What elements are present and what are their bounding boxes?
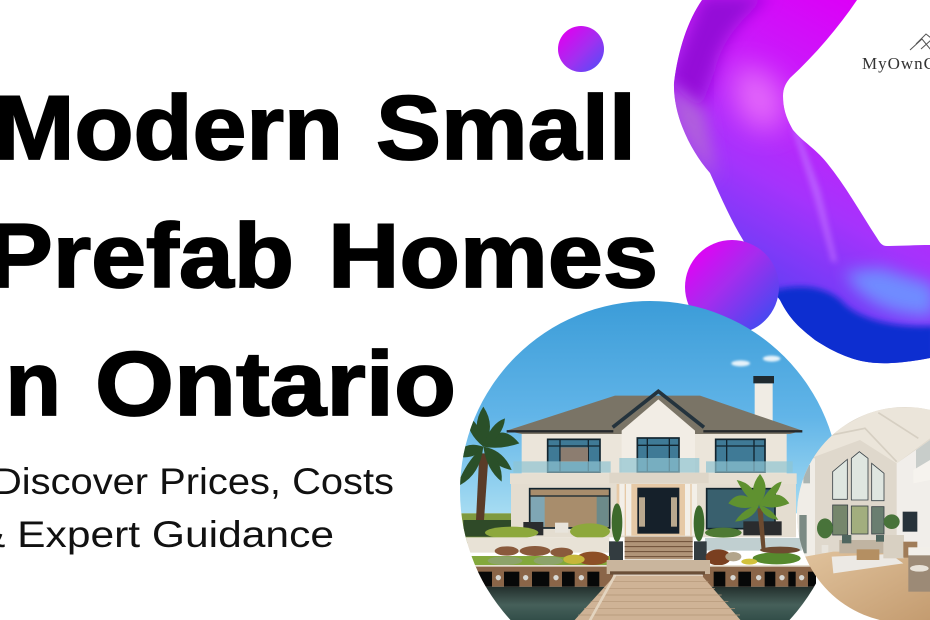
plants (817, 514, 900, 538)
clouds (731, 356, 780, 366)
left palm (457, 407, 519, 520)
subtitle: Discover Prices, Costs (0, 461, 394, 502)
terrace wall (466, 537, 609, 553)
title: Ontario (95, 334, 456, 435)
steps (625, 537, 693, 559)
upper windows (548, 438, 765, 472)
patio furniture (523, 521, 782, 535)
garden left (470, 546, 610, 565)
columns (619, 484, 697, 536)
dock (572, 560, 743, 620)
chimney (753, 376, 774, 421)
water (486, 586, 814, 620)
photo: lakeside house (457, 300, 840, 620)
sky (460, 300, 840, 513)
title: Modern (0, 78, 343, 179)
front door (637, 488, 679, 534)
planters (609, 503, 707, 560)
decorative purple sphere (685, 240, 779, 334)
logo mark (910, 34, 930, 50)
title: Small (376, 78, 636, 179)
lower wall (511, 484, 796, 537)
background ground (461, 513, 511, 544)
lower left window (530, 489, 610, 528)
right wall (897, 440, 930, 557)
roof (507, 396, 802, 434)
shrubs on terrace (485, 523, 610, 539)
foreground palm (728, 474, 789, 551)
abstract gradient ribbon (660, 0, 930, 370)
photo: living room interior (790, 400, 930, 620)
gable windows (833, 452, 884, 535)
upper landing (913, 460, 930, 483)
lower right window (707, 489, 775, 529)
logo (862, 34, 930, 73)
subtitle (0, 461, 394, 555)
left wall (797, 458, 815, 557)
balcony slab (510, 473, 797, 484)
sofa (839, 535, 917, 558)
balcony glass (513, 458, 793, 473)
title (0, 78, 658, 435)
seawall (475, 565, 816, 587)
coffee table (857, 549, 879, 560)
gable (622, 400, 695, 458)
tv (903, 512, 917, 532)
garden right (706, 547, 801, 565)
room walls (790, 400, 930, 560)
kitchen island (908, 547, 930, 592)
decorative purple ball top (558, 26, 604, 72)
floor (805, 552, 930, 620)
title: Homes (328, 206, 658, 307)
upper wall (522, 433, 787, 474)
ceiling (810, 407, 930, 463)
